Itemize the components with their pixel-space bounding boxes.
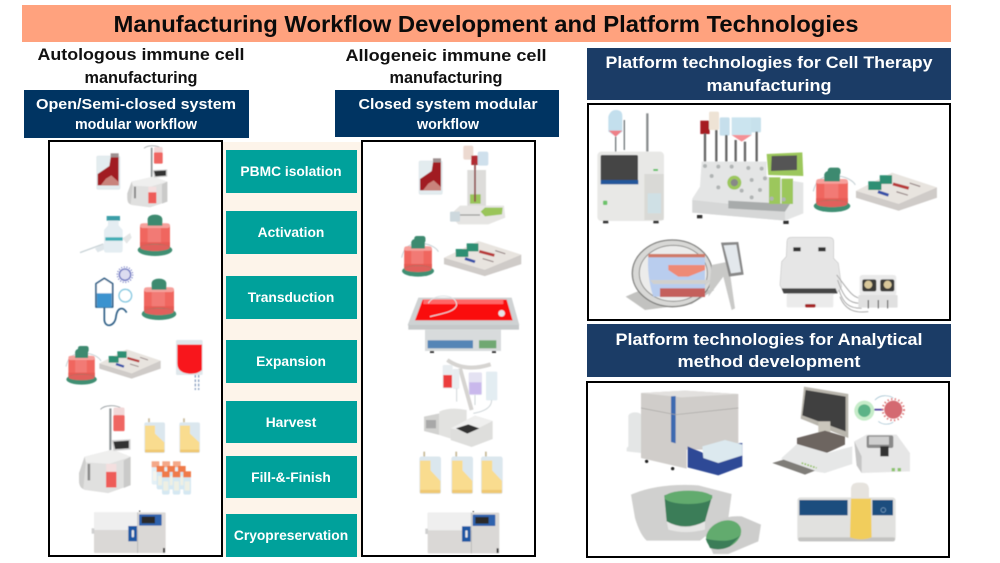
banner: cell therapy platforms (587, 48, 951, 100)
banner: closed workflow (335, 90, 559, 137)
heading: allogeneic (346, 47, 546, 87)
heading: allogeneic: manufacturing (390, 69, 502, 87)
step: expansion: Expansion (256, 354, 326, 369)
step: activation (226, 211, 357, 254)
banner: open workflow (24, 90, 249, 138)
step: cryopreservation (226, 514, 357, 557)
banner: analytical platforms: Platform technologies for Analytical (616, 331, 922, 349)
heading: autologous (38, 46, 245, 87)
icon: reactor and module (402, 236, 521, 277)
icon: three product bags (419, 452, 503, 494)
icon: wave harvest system (424, 360, 497, 447)
icon: computer workstation (772, 387, 852, 475)
heading: autologous: Autologous immune cell (38, 46, 245, 64)
icon: cryo freezer (425, 511, 499, 553)
banner: open workflow: modular workflow (75, 117, 198, 133)
title: Manufacturing Workflow Development and Platform Technologies (114, 11, 858, 37)
icon: immune cell interaction (854, 396, 904, 424)
icon: centrifuge (631, 485, 761, 554)
banner: analytical platforms: method development (678, 353, 861, 371)
heading: autologous: manufacturing (84, 69, 198, 87)
banner: open workflow: Open/Semi-closed system (36, 97, 236, 113)
icon: rocking bioreactor (408, 296, 519, 353)
icon: blood bag and apheresis machine (97, 146, 167, 207)
panel: autologous workflow (49, 141, 222, 556)
banner: closed workflow: Closed system modular (358, 97, 538, 113)
step: transduction (226, 276, 357, 319)
banner: closed workflow: workflow (416, 117, 480, 133)
icon: reactor and module (813, 168, 937, 212)
panel: cell therapy platforms (588, 104, 950, 320)
icon: spectrophotometer (797, 483, 896, 541)
icon: automated manufacturing station (692, 112, 803, 224)
panel: allogeneic workflow (362, 141, 535, 556)
icon: plate reader (854, 435, 910, 473)
step: cryopreservation: Cryopreservation (234, 528, 348, 543)
step: transduction: Transduction (248, 290, 334, 305)
panel: analytical platforms (587, 382, 949, 557)
step: PBMC isolation: PBMC isolation (240, 164, 342, 179)
icon: viral vector, plasmid and reactor (96, 267, 176, 325)
icon: reactor, module and red culture bag (66, 340, 203, 390)
title (22, 5, 951, 42)
icon: cell processing analyzer (597, 110, 664, 223)
icon: harvest machine, product bags and tubes (79, 406, 200, 495)
step: fill and finish (226, 456, 357, 498)
icon: vial, syringe and bioreactor (80, 215, 172, 256)
step: activation: Activation (258, 225, 324, 240)
steps column (226, 150, 357, 557)
icon: blood bag and closed separation system (419, 146, 505, 224)
step: harvest (226, 401, 357, 443)
step: PBMC isolation (226, 150, 357, 193)
icon: flow cytometer (627, 391, 742, 475)
icon: cryo freezer (92, 511, 166, 553)
banner: analytical platforms (587, 324, 951, 377)
icon: perfusion bioreactor unit (780, 237, 898, 312)
step: fill and finish: Fill-&-Finish (251, 470, 331, 485)
banner: cell therapy platforms: manufacturing (706, 77, 832, 95)
step: expansion (226, 340, 357, 383)
heading: allogeneic: Allogeneic immune cell (346, 47, 546, 65)
step: harvest: Harvest (266, 415, 317, 430)
background: steps column (222, 142, 361, 557)
icon: rocking drum incubator (626, 240, 744, 310)
banner: cell therapy platforms: Platform technologies for Cell Therapy (606, 54, 933, 72)
